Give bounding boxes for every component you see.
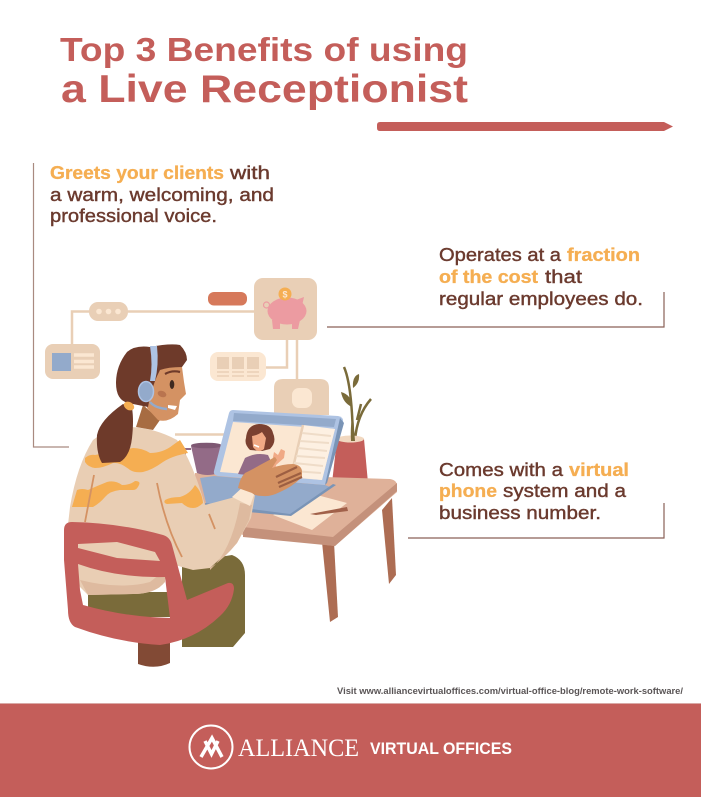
callout: fraction of the cost: fraction <box>567 245 640 265</box>
callout: greets your clients <box>34 163 274 447</box>
callout: greets your clients: a warm, welcoming, and <box>50 185 274 205</box>
title <box>60 32 468 111</box>
office chair <box>64 522 234 667</box>
callout: virtual phone system: Comes with a <box>439 460 564 480</box>
headset <box>138 346 167 409</box>
callout: virtual phone system: virtual <box>569 460 629 480</box>
callout: greets your clients: with <box>229 163 270 183</box>
logo: VIRTUAL OFFICES <box>370 739 512 758</box>
source credit: Visit www.alliancevirtualoffices.com/virtual-office-blog/remote-work-software/ <box>337 686 684 696</box>
receptionist sweater <box>64 427 255 595</box>
receptionist hair <box>97 344 187 463</box>
receptionist hand <box>238 457 302 496</box>
logo <box>190 726 512 768</box>
title: Top 3 Benefits of using <box>60 32 468 69</box>
receptionist pants <box>88 555 245 647</box>
icon: profile tile <box>274 379 329 415</box>
callout: virtual phone system <box>408 460 664 538</box>
icon: piggy bank <box>254 278 317 340</box>
paper and pencil <box>273 495 348 530</box>
illustration: receptionist at desk <box>45 278 397 667</box>
desk <box>195 473 397 622</box>
callout: fraction of the cost <box>327 245 664 327</box>
callout: virtual phone system: system and a <box>503 481 627 501</box>
title accent bar <box>377 122 673 131</box>
callout: virtual phone system: business number. <box>439 503 601 523</box>
icon: profile card <box>45 344 100 379</box>
callout: greets your clients: professional voice. <box>50 206 217 226</box>
plant <box>341 367 371 440</box>
receptionist neck and face <box>136 367 186 430</box>
callout: greets your clients: Greets your clients <box>50 163 224 183</box>
callout: fraction of the cost: Operates at a <box>439 245 562 265</box>
footer band <box>0 703 701 797</box>
callout: fraction of the cost: of the cost <box>439 267 538 287</box>
logo: ALLIANCE <box>238 735 359 762</box>
title: a Live Receptionist <box>61 68 468 111</box>
icon: message dots <box>89 302 128 321</box>
mug <box>185 443 222 475</box>
callout: fraction of the cost: that <box>545 267 582 287</box>
video call person <box>238 424 285 478</box>
connector lines <box>72 312 297 434</box>
laptop <box>200 410 344 516</box>
icon: piggy bank: $ <box>282 290 288 300</box>
icon: grid card <box>210 352 266 381</box>
icon: orange button <box>208 292 247 306</box>
callout: fraction of the cost: regular employees do. <box>439 289 643 309</box>
callout: virtual phone system: phone <box>439 481 497 501</box>
plant pot <box>332 415 368 487</box>
